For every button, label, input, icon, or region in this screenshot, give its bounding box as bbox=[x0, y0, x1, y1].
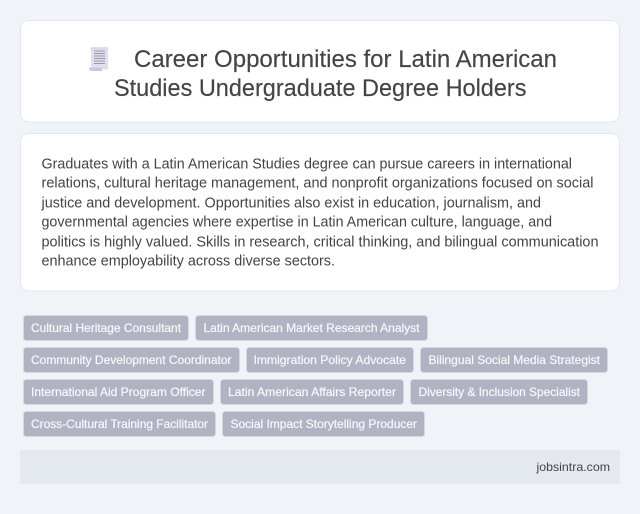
career tags bbox=[24, 316, 608, 436]
heading bbox=[114, 46, 557, 102]
text block: description: enhance employability across diverse sectors. bbox=[42, 253, 335, 269]
panel: title header bbox=[20, 20, 620, 122]
panel: description bbox=[20, 134, 620, 291]
tag: Bilingual Social Media Strategist: Bilingual Social Media Strategist bbox=[428, 353, 601, 367]
tag: Diversity & Inclusion Specialist bbox=[410, 380, 588, 404]
footer source text: jobsintra.com bbox=[535, 460, 610, 474]
tag: Cultural Heritage Consultant bbox=[24, 316, 188, 340]
footer bbox=[20, 450, 620, 484]
tag: Latin American Affairs Reporter bbox=[220, 380, 404, 404]
text block: description: politics is highly valued. Skills in research, critical thinking, and bilingual communication bbox=[42, 234, 598, 250]
text block: description: justice and development. Opportunities also exist in education, journalism, and bbox=[41, 195, 541, 211]
tag: Social Impact Storytelling Producer: Social Impact Storytelling Producer bbox=[230, 417, 417, 431]
text block: description bbox=[41, 156, 599, 269]
tag: Immigration Policy Advocate bbox=[246, 348, 414, 372]
heading: Studies Undergraduate Degree Holders bbox=[114, 75, 526, 102]
text block: description: governmental agencies where expertise in Latin American culture, language, and bbox=[42, 214, 552, 230]
text block: description: Graduates with a Latin American Studies degree can pursue careers in international bbox=[42, 156, 572, 172]
tag: Community Development Coordinator: Community Development Coordinator bbox=[31, 353, 232, 367]
tag: Diversity & Inclusion Specialist: Diversity & Inclusion Specialist bbox=[418, 385, 581, 399]
tag: Immigration Policy Advocate: Immigration Policy Advocate bbox=[254, 353, 406, 367]
icon: paper scroll bbox=[89, 47, 108, 71]
tag: Cross-Cultural Training Facilitator: Cross-Cultural Training Facilitator bbox=[31, 417, 208, 431]
tag: Community Development Coordinator bbox=[24, 348, 240, 372]
tag: International Aid Program Officer bbox=[24, 380, 214, 404]
tag: Cross-Cultural Training Facilitator bbox=[24, 412, 216, 436]
tag: Latin American Affairs Reporter: Latin American Affairs Reporter bbox=[228, 385, 396, 399]
text block: description: relations, cultural heritage management, and nonprofit organizations focused on social bbox=[42, 175, 594, 191]
tag: Cultural Heritage Consultant: Cultural Heritage Consultant bbox=[31, 321, 182, 335]
heading: Career Opportunities for Latin American bbox=[134, 46, 557, 73]
tag: Bilingual Social Media Strategist bbox=[420, 348, 608, 372]
tag: Social Impact Storytelling Producer bbox=[222, 412, 424, 436]
tag: Latin American Market Research Analyst: Latin American Market Research Analyst bbox=[204, 321, 420, 335]
tag: Latin American Market Research Analyst bbox=[196, 316, 428, 340]
tag: International Aid Program Officer: International Aid Program Officer bbox=[31, 385, 206, 399]
